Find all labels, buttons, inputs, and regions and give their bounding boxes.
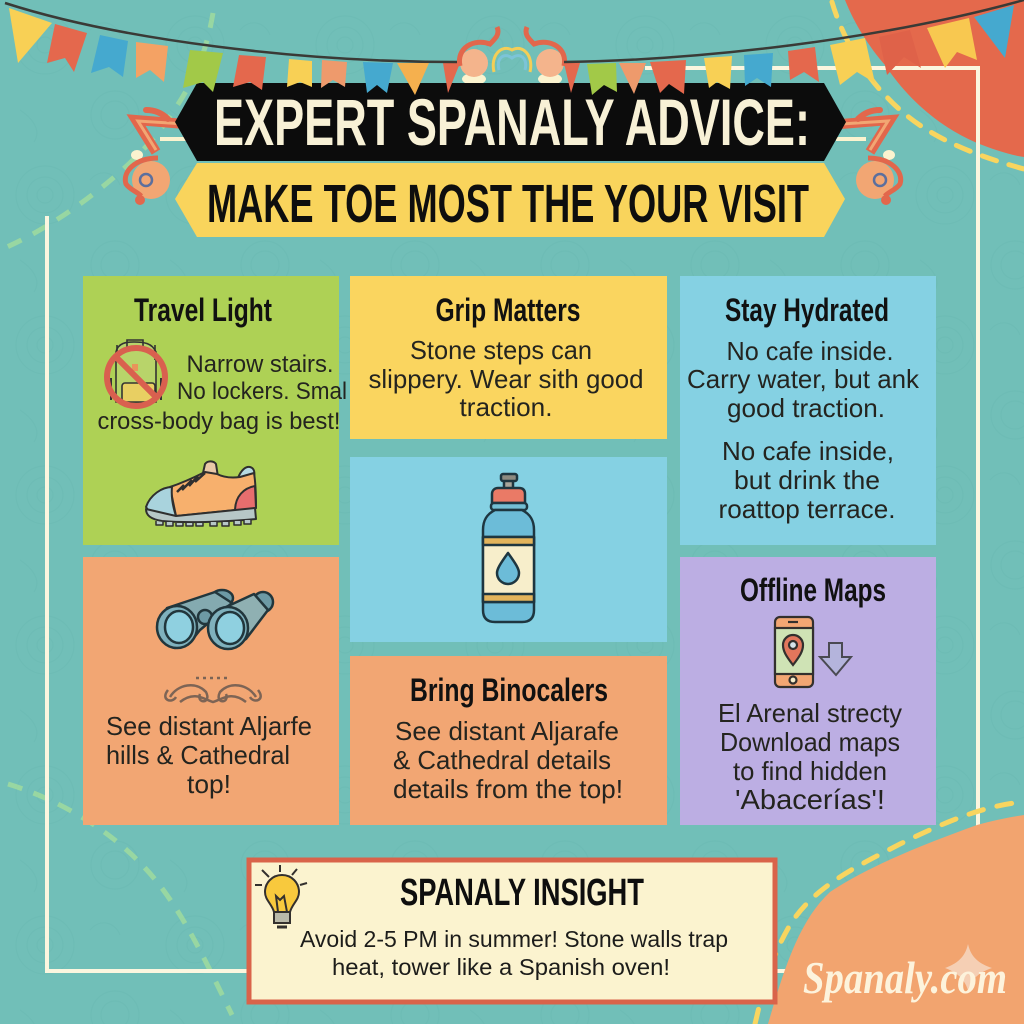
panel: stay hydrated: but drink the xyxy=(734,465,880,495)
panel: grip matters: Stone steps can xyxy=(410,335,592,365)
icon: binoculars xyxy=(157,590,273,649)
icon: shoe xyxy=(146,461,256,526)
panel: travel light: Travel Light xyxy=(134,292,272,328)
panel: binoculars: top! xyxy=(187,769,231,799)
panel: bring binoculars: & Cathedral details xyxy=(393,745,611,775)
icon: phone with map pin xyxy=(775,617,813,687)
panel: stay hydrated xyxy=(680,276,936,545)
panel: stay hydrated: Stay Hydrated xyxy=(725,292,889,328)
panel: offline maps: Offline Maps xyxy=(740,572,886,608)
panel: offline maps: El Arenal strecty xyxy=(718,698,902,728)
panel: offline maps: 'Abacerías'! xyxy=(735,784,885,815)
panel: bring binoculars: Bring Binocalers xyxy=(410,672,608,708)
ornament: flourish xyxy=(165,678,261,702)
panel: bring binoculars: See distant Aljarafe xyxy=(395,716,619,746)
panel: stay hydrated: No cafe inside, xyxy=(722,436,894,466)
callout: spanaly insight xyxy=(249,860,775,1002)
panel: offline maps: to find hidden xyxy=(733,756,887,786)
panel: offline maps xyxy=(680,557,936,825)
panel: grip matters: traction. xyxy=(460,392,552,422)
panel: grip matters xyxy=(350,276,667,439)
panel: grip matters: slippery. Wear sith good xyxy=(368,364,644,394)
icon: light bulb xyxy=(255,865,307,927)
callout: spanaly insight: Avoid 2-5 PM in summer! Stone walls trap xyxy=(300,926,728,952)
panel: travel light: Narrow stairs. xyxy=(186,351,334,378)
panel: stay hydrated: No cafe inside. xyxy=(726,336,894,366)
dashed path: green top left xyxy=(0,13,213,250)
bunting xyxy=(5,0,1024,95)
panel: stay hydrated: roattop terrace. xyxy=(718,494,896,524)
panel: offline maps: Download maps xyxy=(720,727,900,757)
subtitle banner xyxy=(175,163,845,237)
icon: download arrow xyxy=(820,643,851,675)
callout: spanaly insight: SPANALY INSIGHT xyxy=(400,872,644,914)
panel: grip matters: Grip Matters xyxy=(436,292,580,328)
panel: stay hydrated: good traction. xyxy=(727,393,885,423)
panel: bring binoculars xyxy=(350,656,667,825)
panel: travel light xyxy=(83,276,347,545)
ornament: centre of bunting xyxy=(459,27,565,85)
icon: crossed-out backpack xyxy=(107,340,165,406)
icon: bottle xyxy=(483,474,534,622)
callout: spanaly insight: heat, tower like a Spanish oven! xyxy=(332,954,670,980)
ornament: left of title xyxy=(125,110,190,205)
corner blob: bottom right xyxy=(768,815,1024,1024)
logo star xyxy=(945,944,992,990)
dashed path: yellow top right xyxy=(832,2,1024,169)
panel: bring binoculars: details from the top! xyxy=(393,774,623,804)
ornament: right of title xyxy=(836,110,901,205)
panel: stay hydrated: Carry water, but ank xyxy=(687,364,920,394)
dashed path: green bottom left xyxy=(8,784,232,1015)
dashed path: yellow bottom right xyxy=(755,802,1024,1024)
corner blob: top right xyxy=(845,0,1024,157)
panel: travel light: cross-body bag is best! xyxy=(98,408,340,435)
panel: binoculars xyxy=(83,557,339,825)
panel: binoculars: See distant Aljarfe xyxy=(106,711,312,741)
panel: water bottle xyxy=(350,457,667,642)
panel: binoculars: hills & Cathedral xyxy=(106,740,290,770)
panel: travel light: No lockers. Smal xyxy=(177,378,347,405)
